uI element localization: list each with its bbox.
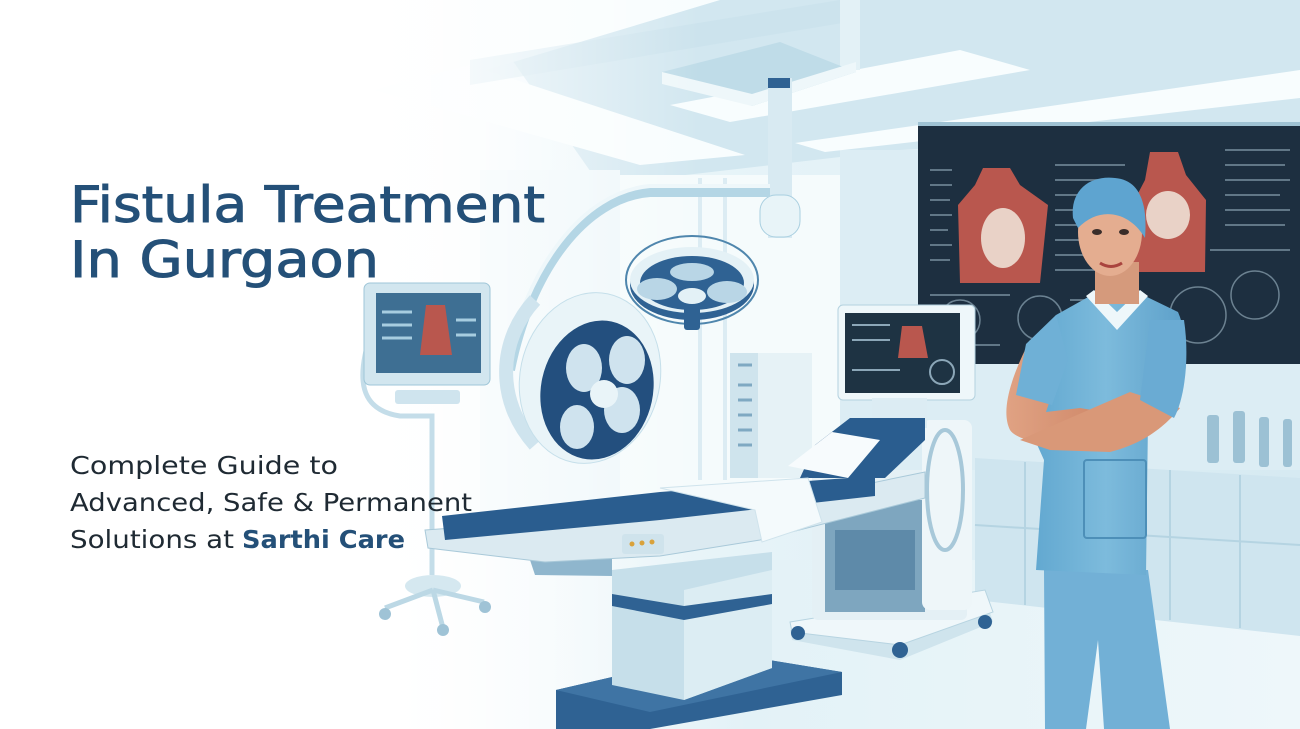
nurse: [1006, 178, 1186, 729]
surgical lamp small: [626, 236, 758, 330]
left white fade: [0, 0, 700, 729]
anesthesia machine: [790, 305, 993, 660]
lamp support arm: [505, 78, 800, 370]
side monitor on stand: [363, 283, 491, 636]
title line 2: In Gurgaon: [70, 231, 379, 289]
subtitle line 1: Complete Guide to: [70, 451, 338, 480]
counter with bottles: [975, 411, 1300, 636]
wall monitor with anatomy: [918, 122, 1300, 364]
subtitle line 3: Solutions at: [70, 525, 234, 554]
ceiling light panels: [375, 0, 1300, 165]
ceiling boom arm: [470, 0, 860, 106]
surgical lamp large: [504, 279, 676, 477]
operating table: [425, 418, 925, 729]
subtitle line 2: Advanced, Safe & Permanent: [70, 488, 472, 517]
brand name: Sarthi Care: [242, 525, 405, 554]
equipment cabinet: [730, 353, 812, 478]
title: Fistula Treatment: [70, 176, 545, 234]
